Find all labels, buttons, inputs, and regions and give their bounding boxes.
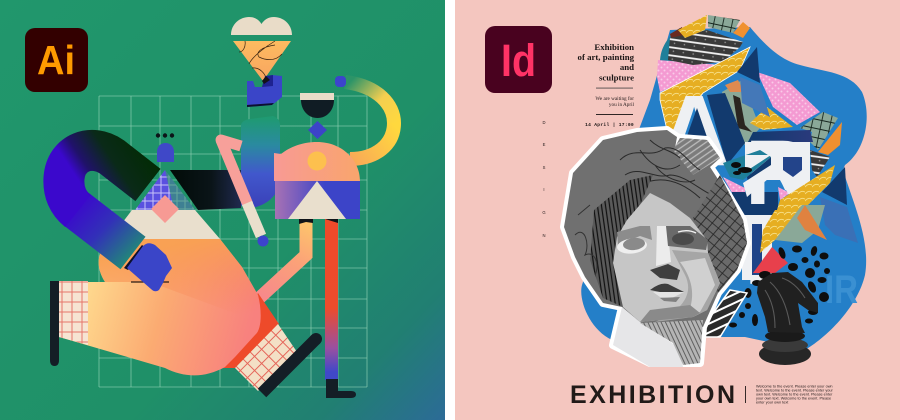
poster heading: and: [620, 62, 634, 72]
right leg and foot: [325, 219, 356, 398]
vertical word DESIGN: [542, 120, 546, 238]
peach dome: [274, 142, 360, 181]
big letter R: R: [745, 122, 811, 224]
striped collar: [703, 290, 747, 337]
big letter A: A: [658, 75, 730, 187]
red shoe: [222, 293, 279, 368]
big letter T: T: [727, 194, 788, 306]
date: 14 April | 17:00: [585, 122, 634, 128]
heart bottom with lines: [233, 41, 291, 81]
Illustrator logo: [25, 28, 88, 92]
vertical word DESIGN: G: [542, 210, 546, 215]
collage lower papers: [760, 165, 858, 253]
mouth: [650, 284, 684, 302]
InDesign logo: Id: [501, 35, 536, 86]
peach body: [59, 239, 261, 375]
lower face light hatch: [680, 258, 715, 314]
event description: your own text. Welcome to the event. Please: [756, 396, 831, 400]
event description: own text. Welcome to the event. Please enter: [756, 392, 833, 396]
left eye: [616, 226, 652, 255]
exhibition title: EXHIBITION: [570, 381, 735, 409]
forearm column: [241, 116, 280, 209]
jaw shadow: [640, 305, 700, 322]
event description: enter your own text: [756, 400, 789, 404]
left curls: [575, 205, 597, 275]
collage top: [657, 15, 842, 177]
invitation text: We are waiting for: [595, 95, 634, 102]
nose bridge: [656, 226, 671, 266]
event description: [756, 384, 833, 404]
heading rule: [596, 88, 633, 89]
checked shoe sole: [235, 324, 297, 391]
panel: InDesign poster: [455, 0, 900, 420]
red paper: [753, 247, 788, 273]
bust white outline: [564, 130, 747, 363]
poster heading: sculpture: [599, 72, 634, 82]
panel: Illustrator artwork: [0, 0, 445, 420]
poster heading: Exhibition: [594, 42, 634, 52]
chess knight: [757, 272, 818, 365]
cheek shadow: [655, 250, 720, 322]
curls on crown: [620, 140, 712, 198]
vertical word DESIGN: E: [543, 142, 546, 147]
blue small dome: [157, 143, 174, 162]
hair: [564, 130, 747, 327]
yellow arc and blue dot: [335, 76, 394, 159]
net hair right: [693, 175, 747, 293]
left leg: [255, 219, 313, 302]
pyramid: [110, 170, 220, 239]
title divider: [744, 386, 747, 403]
Illustrator logo: Ai: [37, 37, 75, 83]
event description: text. Welcome to the event. Please enter your: [756, 388, 833, 392]
grid: [99, 96, 367, 387]
vertical word DESIGN: I: [543, 187, 545, 192]
marble bust: [564, 130, 747, 367]
black handle: [50, 281, 59, 366]
black spots: [729, 245, 830, 328]
heart top: [231, 17, 292, 35]
date rule: [596, 113, 633, 116]
poster heading: [578, 42, 635, 82]
neck: [613, 307, 683, 367]
blue diamond: [308, 121, 327, 139]
InDesign logo: [485, 26, 552, 93]
thin line on body: [131, 281, 169, 283]
invitation text: [595, 95, 635, 108]
dark hatched hair left: [590, 175, 653, 307]
blue wrist dot: [258, 236, 268, 246]
blue blob: [581, 27, 867, 350]
collage middle: [723, 177, 790, 200]
vertical word DESIGN: S: [543, 165, 546, 170]
magnet arm: [64, 150, 148, 253]
face: [613, 193, 720, 322]
black bar: [262, 339, 316, 393]
poster heading: of art, painting: [578, 52, 635, 62]
hand holding heart: [247, 75, 282, 107]
neck hatching: [640, 320, 703, 365]
faint letters on blob: IR: [825, 268, 858, 312]
top right hair stripes: [673, 138, 720, 175]
three dots: [156, 133, 174, 138]
blue hand: [124, 243, 172, 291]
black band: [170, 170, 241, 210]
pink diamond: [151, 195, 179, 223]
invitation text: you in April: [609, 102, 635, 108]
right eye: [666, 226, 708, 250]
base block: [275, 181, 360, 219]
vertical word DESIGN: D: [542, 120, 546, 125]
yellow circle: [308, 152, 326, 170]
nose shadow: [650, 264, 680, 280]
checked cuff: [59, 281, 88, 345]
pink arm: [221, 140, 261, 236]
vertical word DESIGN: N: [542, 233, 546, 238]
goblet: [300, 93, 334, 118]
event description: Welcome to the event. Please enter your own: [756, 384, 833, 388]
